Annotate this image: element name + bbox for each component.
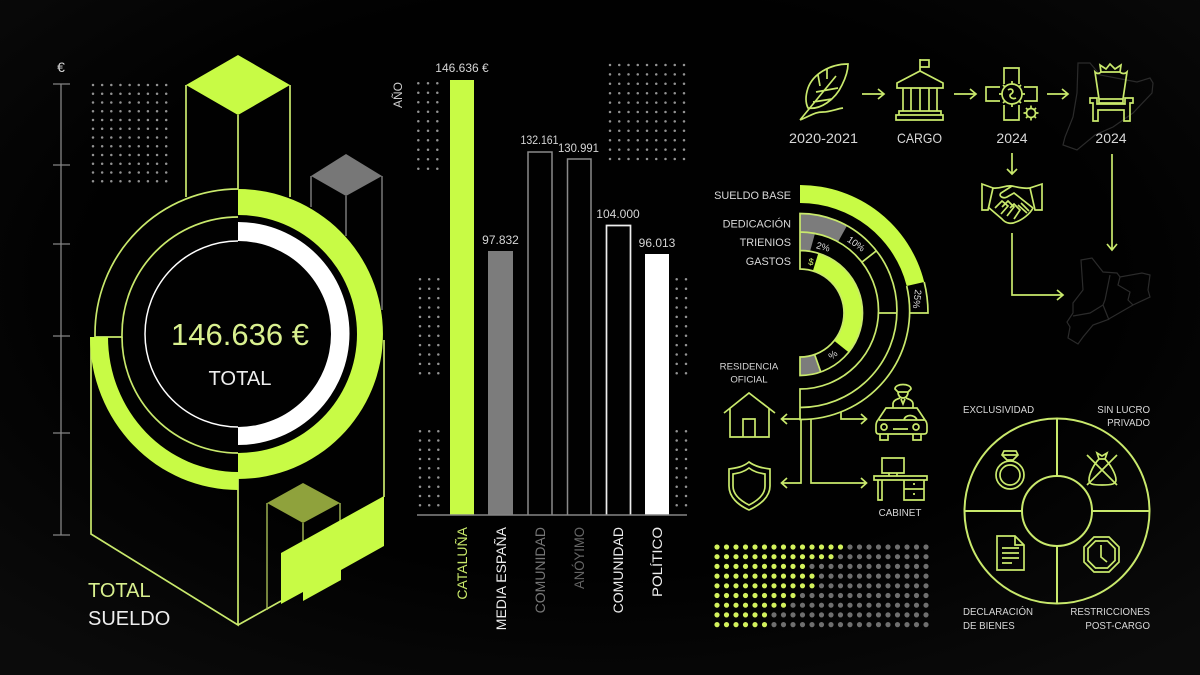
bar chart: COMUNIDAD xyxy=(532,527,548,613)
semicircular breakdown chart: 2% xyxy=(815,240,831,255)
small olive cube xyxy=(267,483,340,610)
bar chart: ANÓYIMO xyxy=(571,527,587,589)
dot grid left xyxy=(93,85,166,183)
wheel labels: SIN LUCRO xyxy=(1097,405,1150,416)
dot matrix xyxy=(717,547,928,625)
wheel labels: DE BIENES xyxy=(963,621,1015,632)
flow arrows xyxy=(862,89,1117,300)
isometric base box xyxy=(91,337,384,625)
bar chart: MEDIA ESPAÑA xyxy=(493,526,509,630)
semicircular breakdown chart: $ xyxy=(807,257,815,268)
wheel labels: EXCLUSIVIDAD xyxy=(963,405,1034,416)
residencia oficial label xyxy=(720,362,779,386)
semicircular breakdown chart: 25% xyxy=(910,289,923,310)
wheel labels: DECLARACIÓN xyxy=(963,607,1033,618)
bar chart: 97.832 xyxy=(482,233,519,247)
año axis label: AÑO xyxy=(391,82,405,108)
chart dot grids xyxy=(418,65,686,507)
icon: car with driver xyxy=(876,384,927,440)
icon: feather xyxy=(800,64,848,120)
step labels xyxy=(789,130,1127,146)
total sueldo caption: SUELDO xyxy=(88,608,170,630)
semicircular breakdown chart: % xyxy=(827,348,841,362)
bar chart: COMUNIDAD xyxy=(610,527,626,613)
euro axis xyxy=(53,59,70,535)
icon: house xyxy=(724,393,775,437)
semicircular breakdown chart xyxy=(714,185,928,420)
map outline behind throne xyxy=(1063,63,1153,150)
step labels: 2024 xyxy=(996,130,1028,146)
bar chart: POLÍTICO xyxy=(649,527,665,597)
total value: 146.636 € xyxy=(171,317,309,352)
semicircular breakdown chart: GASTOS xyxy=(746,256,791,268)
euro axis: € xyxy=(57,59,65,75)
semicircular breakdown chart: 10% xyxy=(845,234,867,255)
wheel labels: PRIVADO xyxy=(1107,418,1150,429)
bar chart: 146.636 € xyxy=(435,61,489,75)
bar chart xyxy=(417,61,687,630)
semicircular breakdown chart: TRIENIOS xyxy=(740,237,791,249)
tall lime cube xyxy=(186,55,290,197)
cabinet label: CABINET xyxy=(879,508,921,519)
total sueldo caption xyxy=(88,580,170,630)
total label: TOTAL xyxy=(208,368,272,390)
wheel labels: POST-CARGO xyxy=(1085,621,1150,632)
gray cube xyxy=(311,154,382,310)
bar chart: 132.161 xyxy=(520,133,559,147)
semicircular breakdown chart: DEDICACIÓN xyxy=(723,218,791,230)
step labels: 2024 xyxy=(1095,130,1127,146)
residencia oficial label: RESIDENCIA xyxy=(720,362,779,372)
connector arrows xyxy=(782,412,866,488)
wheel labels: RESTRICCIONES xyxy=(1070,607,1151,618)
icon: clock xyxy=(1084,537,1119,572)
radial chart xyxy=(90,189,383,490)
icon: crossed money bag xyxy=(1087,453,1117,485)
lime band xyxy=(281,496,384,604)
icon: throne xyxy=(1090,64,1133,121)
step labels: CARGO xyxy=(897,130,942,146)
bar chart: CATALUÑA xyxy=(454,526,470,600)
icon: shield xyxy=(729,462,770,510)
icon: virus cross xyxy=(986,68,1038,120)
total sueldo caption: TOTAL xyxy=(88,580,151,602)
icon: document xyxy=(997,536,1024,570)
quadrant wheel xyxy=(964,418,1150,604)
icon: desk xyxy=(874,458,927,500)
bar chart: 130.991 xyxy=(558,141,599,155)
icon: ring xyxy=(996,451,1024,489)
residencia oficial label: OFICIAL xyxy=(730,374,768,386)
wheel labels xyxy=(963,405,1151,632)
icon: handshake xyxy=(982,184,1042,223)
map of Catalonia xyxy=(1067,258,1150,344)
icon: government building xyxy=(896,59,943,120)
bar chart: 96.013 xyxy=(639,236,676,250)
semicircular breakdown chart: SUELDO BASE xyxy=(714,190,791,202)
bar chart: 104.000 xyxy=(596,207,640,221)
step labels: 2020-2021 xyxy=(789,130,858,146)
